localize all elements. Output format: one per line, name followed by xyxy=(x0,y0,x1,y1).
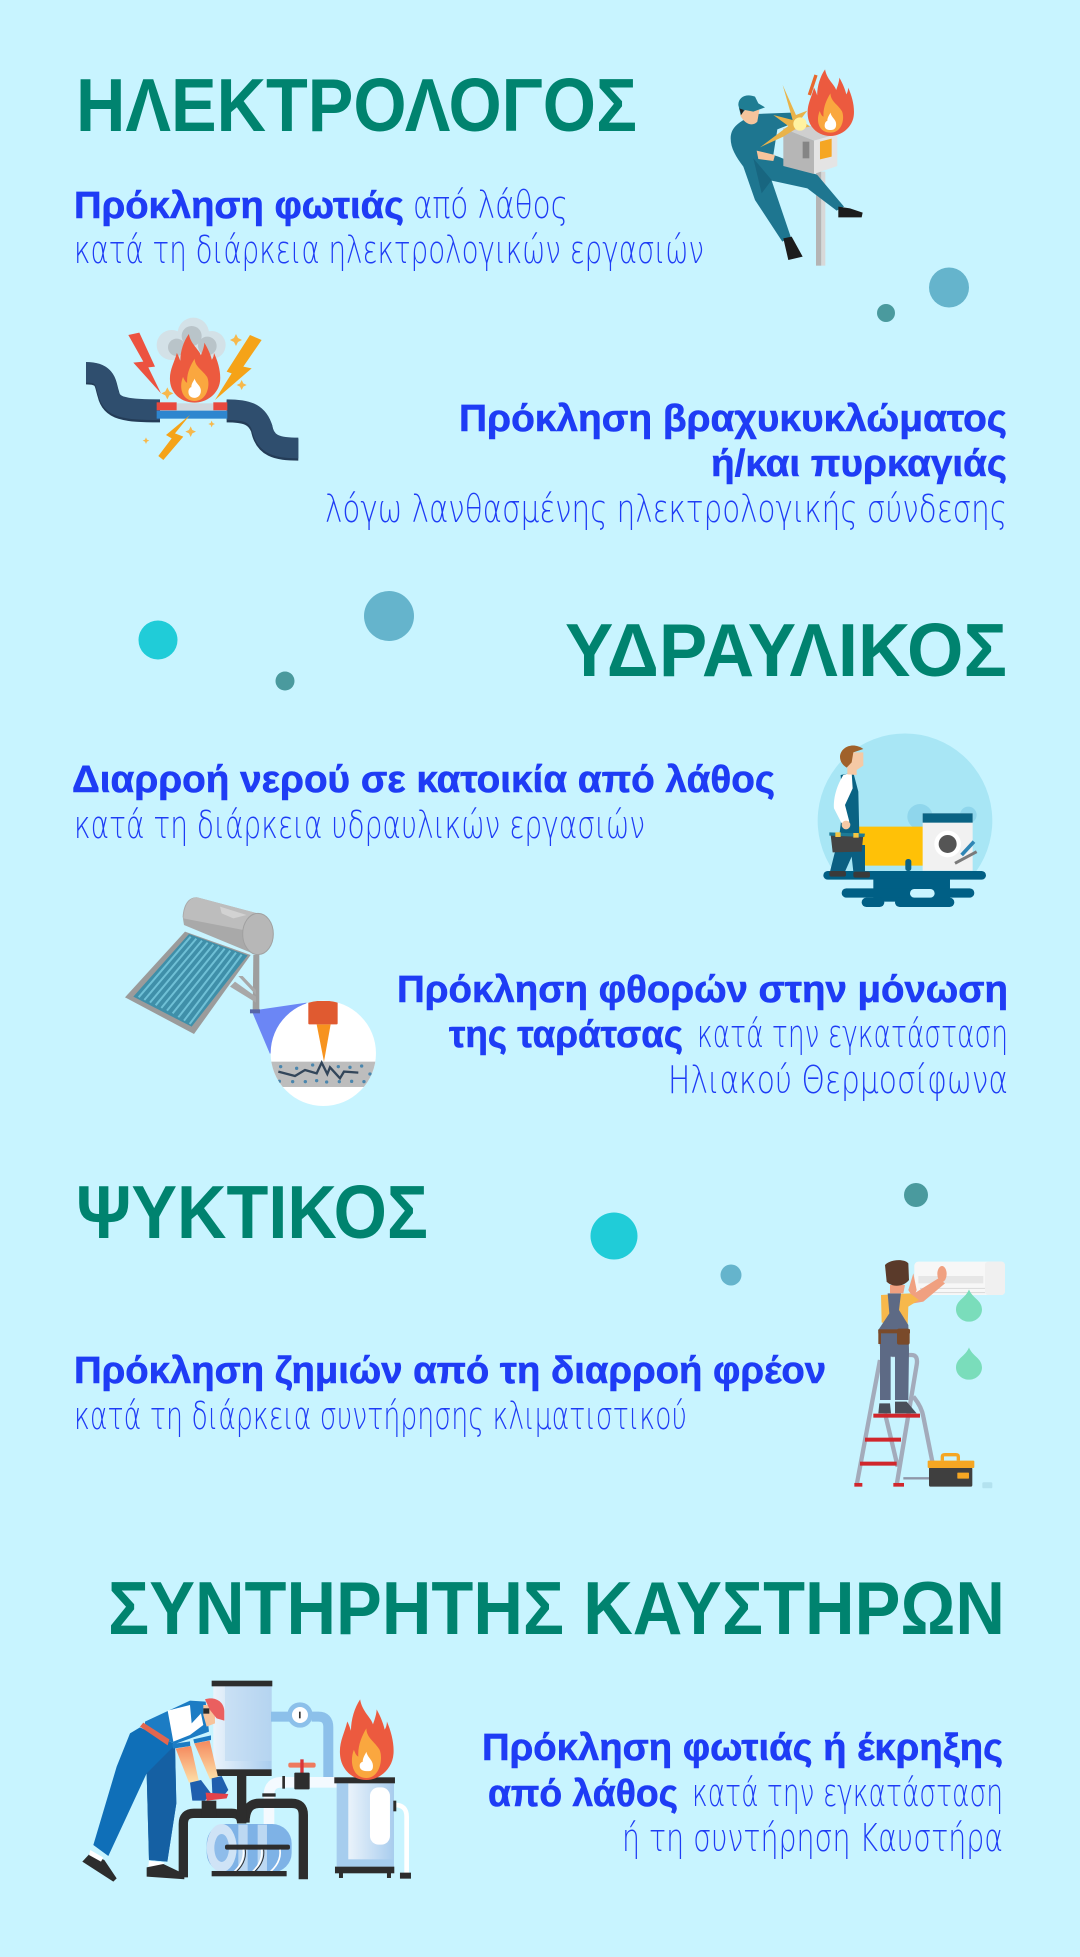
text block: freon leak: Πρόκληση ζημιών από τη διαρροή φρέον xyxy=(74,1350,826,1392)
text block: freon leak xyxy=(74,1350,826,1438)
text block: water leak xyxy=(72,759,775,847)
text block: fire or explosion: Πρόκληση φωτιάς ή έκρηξης xyxy=(482,1727,1003,1769)
text block: water leak: Διαρροή νερού σε κατοικία από λάθος xyxy=(72,759,775,801)
text block: insulation damage: Πρόκληση φθορών στην μόνωση xyxy=(397,969,1008,1011)
icon: short-circuited cable with fire xyxy=(86,318,298,460)
decorative dots: refrigeration xyxy=(590,1183,928,1286)
icon: flame xyxy=(340,1699,394,1780)
text block: short circuit xyxy=(325,398,1007,531)
text block: fire or explosion: από λάθος xyxy=(488,1773,678,1815)
icon: flame xyxy=(808,69,854,136)
decorative dots: plumber xyxy=(138,591,414,690)
icon: solar water heater with roof damage xyxy=(125,897,380,1106)
text block: short circuit: ή/και πυρκαγιάς xyxy=(711,443,1007,485)
icon: technician on ladder servicing air conditioner xyxy=(854,1260,1005,1488)
text block: fire from error xyxy=(74,183,704,272)
text block: freon leak: κατά τη διάρκεια συντήρησης κλιματιστικού xyxy=(74,1394,687,1438)
panel: electrician xyxy=(74,63,1007,531)
heading: electrician: ΗΛΕΚΤΡΟΛΟΓΟΣ xyxy=(76,63,637,147)
text block: fire from error: κατά τη διάρκεια ηλεκτρολογικών εργασιών xyxy=(74,228,704,272)
text block: short circuit: Πρόκληση βραχυκυκλώματος xyxy=(459,398,1007,440)
panel: burner maintainer xyxy=(82,1566,1005,1882)
icon: worker servicing boiler with fire xyxy=(82,1681,411,1882)
text block: fire or explosion xyxy=(482,1727,1003,1860)
text block: insulation damage: της ταράτσας xyxy=(449,1014,683,1056)
heading: refrigeration technician: ΨΥΚΤΙΚΟΣ xyxy=(76,1170,428,1254)
text block: fire from error: από λάθος xyxy=(413,183,568,227)
panel: refrigeration technician xyxy=(74,1170,1005,1488)
decorative dots: electrician xyxy=(877,268,969,322)
text block: insulation damage xyxy=(397,969,1008,1102)
icon: flame xyxy=(170,334,220,403)
icon: electrician on pole with fire xyxy=(731,69,863,266)
text block: fire from error: Πρόκληση φωτιάς xyxy=(74,185,404,227)
icon: plumber with bathtub and washer xyxy=(818,733,992,907)
panel: plumber xyxy=(72,591,1008,1106)
heading: plumber: ΥΔΡΑΥΛΙΚΟΣ xyxy=(565,608,1007,692)
heading: burner maintainer: ΣΥΝΤΗΡΗΤΗΣ ΚΑΥΣΤΗΡΩΝ xyxy=(108,1566,1005,1650)
text block: water leak: κατά τη διάρκεια υδραυλικών εργασιών xyxy=(74,803,645,847)
